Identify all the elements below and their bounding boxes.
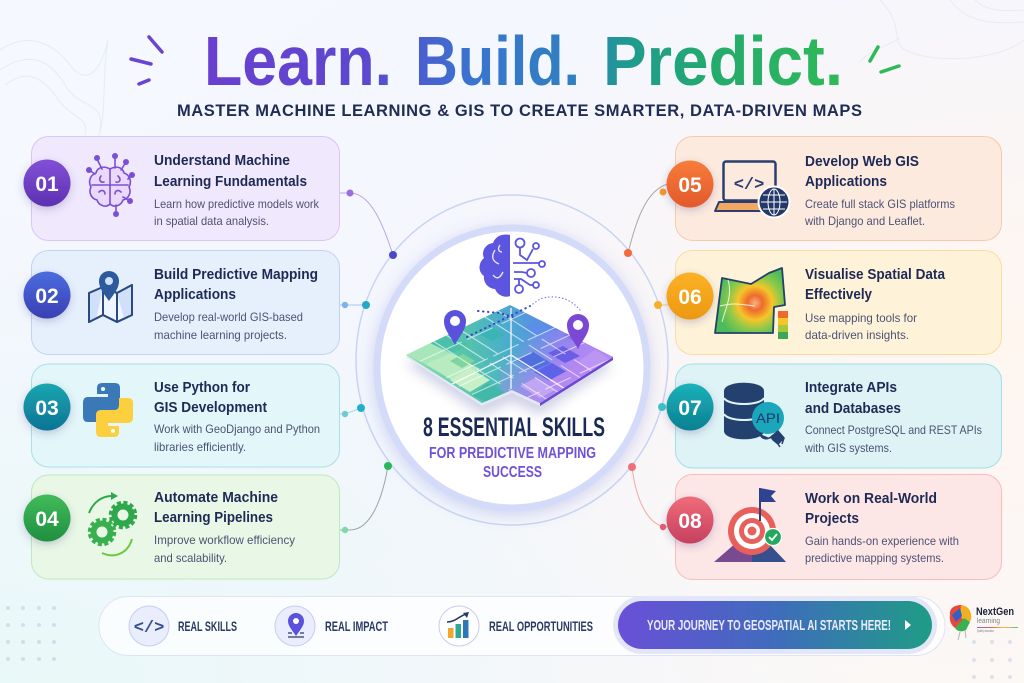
panel: skill 01 (24, 136, 340, 240)
text: data-driven insights. (805, 328, 909, 342)
badge 01: 01 (35, 173, 59, 196)
text: Create full stack GIS platforms (805, 197, 955, 211)
badge 02: 02 (35, 285, 59, 308)
icon: laptop with globe (715, 162, 790, 218)
icon: gears with arrows (89, 492, 136, 555)
text: Learning Fundamentals (154, 173, 307, 190)
real impact: REAL IMPACT (325, 618, 388, 634)
icon: database with API (724, 383, 784, 447)
text: Learn how predictive models work (154, 197, 320, 211)
text (805, 490, 959, 565)
text: Understand Machine (154, 152, 290, 169)
real skills: REAL SKILLS (178, 618, 237, 634)
dot grid: bottom right (972, 640, 1012, 679)
text: Connect PostgreSQL and REST APIs (805, 423, 982, 437)
logo: NextGen learning (950, 605, 1018, 640)
text (154, 266, 318, 342)
title: Learn. (204, 22, 392, 100)
text (805, 266, 946, 342)
real impact (275, 606, 388, 646)
call to action button (613, 596, 937, 654)
icon: map pin right (567, 314, 589, 349)
text: Work with GeoDjango and Python (154, 422, 320, 436)
title: Build. (415, 22, 580, 100)
icon: database with API: API (756, 410, 780, 426)
decorative sparks: left (131, 37, 162, 84)
map shadow (406, 320, 613, 415)
title (204, 22, 843, 100)
text: predictive mapping systems. (805, 551, 944, 565)
text: Automate Machine (154, 489, 278, 506)
decorative sparks: right (870, 47, 899, 72)
text: Applications (154, 286, 236, 303)
dotted route (467, 297, 580, 337)
text: with Django and Leaflet. (804, 214, 925, 228)
badge 08: 08 (678, 510, 702, 533)
title: Predict. (603, 22, 843, 100)
hub heading: 8 ESSENTIAL SKILLS (423, 412, 605, 442)
panel: skill 08 (666, 474, 1002, 580)
text: in spatial data analysis. (154, 214, 269, 228)
text: Integrate APIs (805, 379, 897, 396)
text: Learning Pipelines (154, 509, 273, 526)
badge 05: 05 (678, 174, 702, 197)
text: Use Python for (154, 379, 250, 396)
badge 06 (666, 272, 714, 320)
text (154, 152, 320, 228)
text: and scalability. (154, 551, 227, 565)
text: Gain hands-on experience with (805, 534, 959, 548)
call to action button: YOUR JOURNEY TO GEOSPATIAL AI STARTS HERE! (647, 617, 891, 634)
badge 06: 06 (678, 286, 702, 309)
logo: NextGen learning: Quality education (977, 629, 994, 633)
bottom bar (99, 596, 945, 656)
dot grid: bottom left (6, 606, 56, 661)
outer ring (356, 195, 668, 525)
subtitle: MASTER MACHINE LEARNING & GIS TO CREATE SMARTER, DATA-DRIVEN MAPS (177, 102, 862, 120)
panel: skill 05 (666, 136, 1002, 240)
panel: skill 04 (24, 475, 340, 579)
text: Improve workflow efficiency (154, 533, 295, 547)
badge 05 (666, 160, 714, 208)
badge 04 (24, 494, 70, 542)
text (154, 379, 320, 454)
text: Develop real-world GIS-based (154, 310, 303, 324)
icon: map pin left (444, 310, 466, 345)
text (804, 153, 955, 228)
text: machine learning projects. (154, 328, 287, 342)
icon: brain network (86, 153, 135, 217)
badge 08 (666, 496, 714, 544)
badge 03 (24, 384, 70, 430)
badge 07: 07 (678, 397, 702, 420)
text: libraries efficiently. (154, 440, 246, 454)
badge 04: 04 (35, 508, 59, 531)
logo brain (950, 605, 971, 640)
hub subheading: FOR PREDICTIVE MAPPING (429, 445, 596, 462)
real skills: </> (134, 619, 164, 638)
logo: NextGen learning: learning (977, 618, 1000, 625)
hub subheading: SUCCESS (483, 464, 542, 481)
icon: laptop with globe: </> (734, 176, 764, 195)
panel: skill 03 (24, 364, 340, 467)
panel: skill 02 (24, 250, 340, 354)
text: with GIS systems. (804, 441, 892, 455)
hub subheading (429, 445, 596, 481)
icon: heat map (715, 268, 788, 339)
text: Develop Web GIS (805, 153, 919, 170)
text: Use mapping tools for (805, 311, 917, 325)
connector dots on ring (342, 188, 666, 533)
text (154, 489, 295, 565)
text: Visualise Spatial Data (805, 266, 946, 283)
connectors (340, 184, 668, 530)
logo: NextGen learning: NextGen (976, 606, 1014, 618)
text: and Databases (805, 400, 901, 417)
center hub (342, 188, 668, 533)
isometric map (406, 305, 613, 406)
text: Applications (805, 173, 887, 190)
text: Effectively (805, 286, 873, 303)
badge 02 (24, 272, 70, 318)
badge 03: 03 (35, 397, 59, 420)
badge 01 (24, 160, 70, 206)
inner circle (377, 228, 647, 508)
icon: python logo (83, 383, 133, 437)
text: Work on Real-World (805, 490, 937, 507)
text: Build Predictive Mapping (154, 266, 318, 283)
panel: skill 06 (666, 250, 1002, 354)
real opportunities (439, 606, 593, 646)
badge 07 (666, 384, 714, 430)
text: GIS Development (154, 399, 267, 416)
text (804, 379, 982, 455)
text: Projects (805, 510, 859, 527)
icon: brain and circuit (480, 235, 545, 297)
real opportunities: REAL OPPORTUNITIES (489, 618, 593, 634)
icon: target with flag (714, 488, 786, 562)
panel: skill 07 (666, 364, 1002, 468)
real skills (129, 606, 237, 646)
icon: folded map with pin (89, 271, 132, 322)
